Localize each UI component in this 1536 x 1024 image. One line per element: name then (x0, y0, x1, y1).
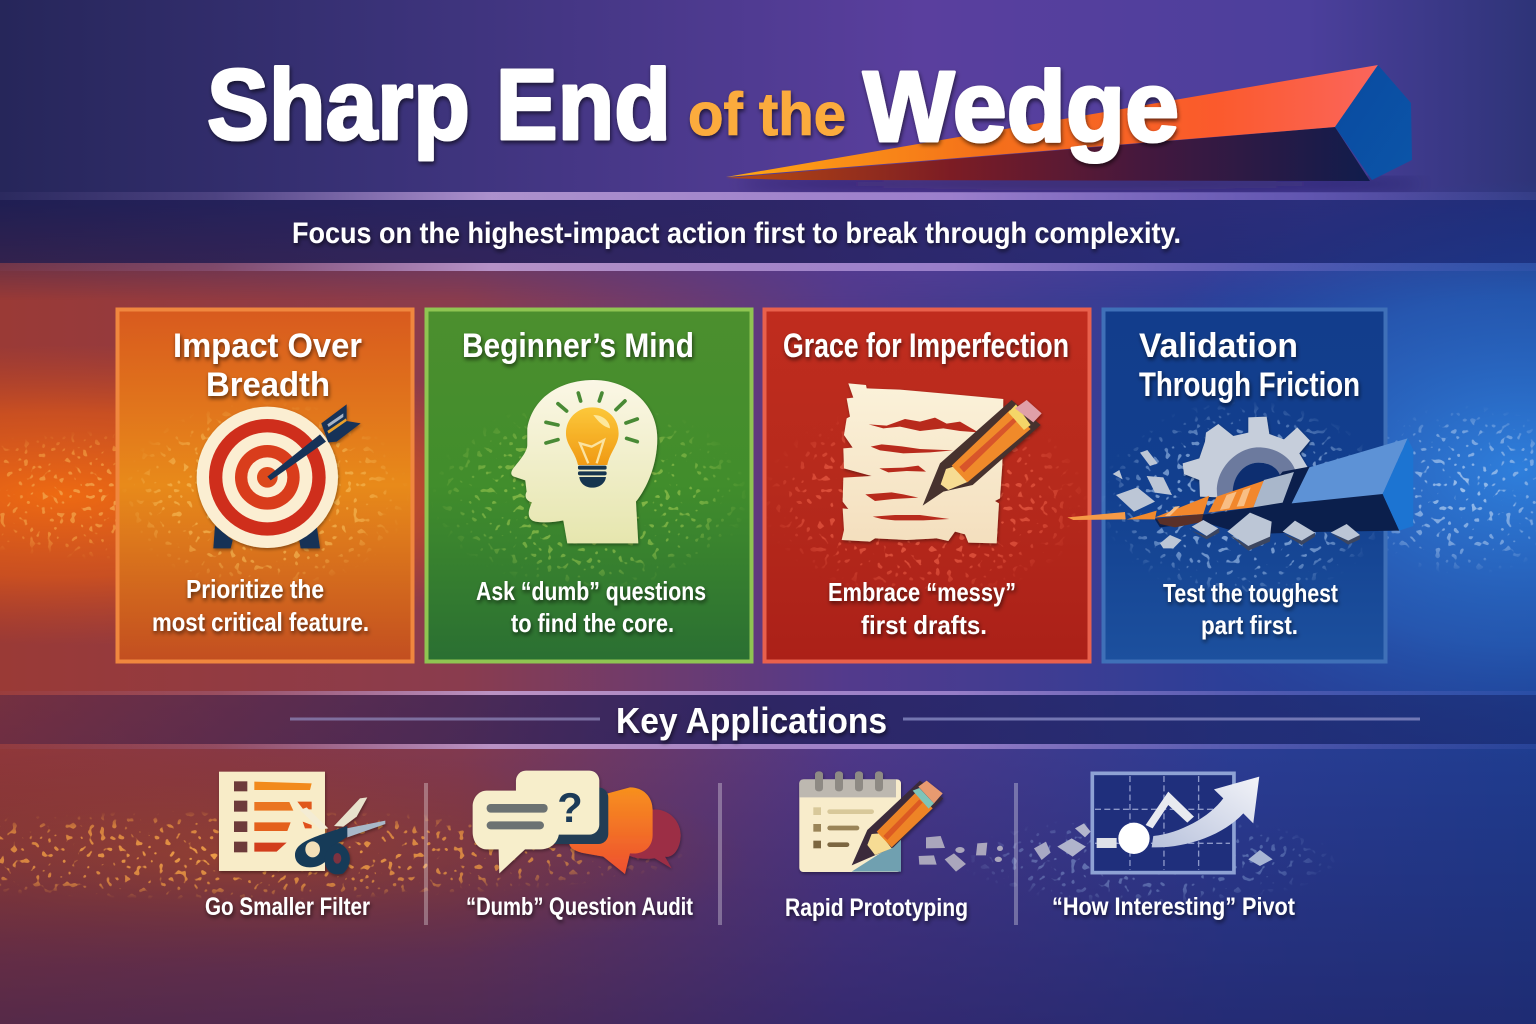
icon: list with scissors (219, 772, 385, 874)
heading: Beginner's Mind: Beginner’s Mind (462, 327, 694, 365)
subtitle: Focus on the highest-impact action first to break through complexity. (292, 217, 1181, 250)
heading: Validation Through Friction: Through Friction (1139, 366, 1360, 404)
heading: Impact Over Breadth (173, 327, 362, 404)
icon: notepad with pencil (799, 771, 943, 872)
panel: Validation Through Friction (1067, 310, 1413, 662)
lower rock shards (1160, 513, 1360, 551)
paper shards (919, 836, 1003, 872)
body text: Test the toughest (1163, 578, 1338, 608)
body text: Embrace “messy” (828, 577, 1016, 607)
wedge (1155, 467, 1399, 535)
body text: part first. (1201, 610, 1298, 640)
wedge graphic (726, 65, 1420, 191)
label: “How Interesting” Pivot (1052, 893, 1296, 921)
panel: Grace for Imperfection (760, 310, 1090, 662)
title: Wedge (863, 51, 1179, 163)
icon: head with light bulb (511, 380, 657, 543)
body text (152, 574, 369, 637)
body text: most critical feature. (152, 607, 369, 637)
heading: Validation Through Friction (1139, 327, 1360, 404)
body text (1163, 578, 1338, 640)
title (207, 49, 1179, 163)
application: Rapid Prototyping (785, 771, 1003, 922)
icon: speech bubbles (473, 771, 681, 874)
body text (828, 577, 1016, 640)
heading: Impact Over Breadth: Impact Over (173, 327, 362, 365)
body text: to find the core. (511, 608, 674, 638)
icon: chart with pivot arrow (1034, 773, 1273, 873)
icon: speech bubbles: ? (557, 784, 583, 831)
icon: target with arrow (197, 404, 361, 548)
body text: Ask “dumb” questions (476, 576, 706, 606)
heading: Key Applications: Key Applications (616, 700, 887, 741)
application: Go Smaller Filter (205, 772, 385, 921)
title: Sharp End (207, 49, 671, 161)
application: How Interesting Pivot (1034, 773, 1296, 921)
application: Dumb Question Audit (466, 771, 694, 921)
icon: wedge breaking gear (1067, 417, 1413, 551)
panel: Impact Over Breadth (118, 310, 412, 662)
body text (476, 576, 706, 638)
heading: Validation Through Friction: Validation (1139, 327, 1298, 365)
heading: Grace for Imperfection: Grace for Imperfection (783, 327, 1069, 365)
label: Rapid Prototyping (785, 894, 968, 922)
label: Go Smaller Filter (205, 893, 370, 921)
gear (1183, 417, 1310, 500)
heading: Impact Over Breadth: Breadth (206, 366, 330, 404)
upper rock shards (1113, 450, 1172, 512)
body text: first drafts. (861, 610, 987, 640)
panel: Beginner's Mind (426, 310, 752, 662)
title: of the (688, 81, 846, 148)
column dividers (424, 783, 1018, 925)
icon: torn draft and pencil (842, 383, 1042, 543)
label: “Dumb” Question Audit (466, 893, 694, 921)
body text: Prioritize the (186, 574, 324, 604)
